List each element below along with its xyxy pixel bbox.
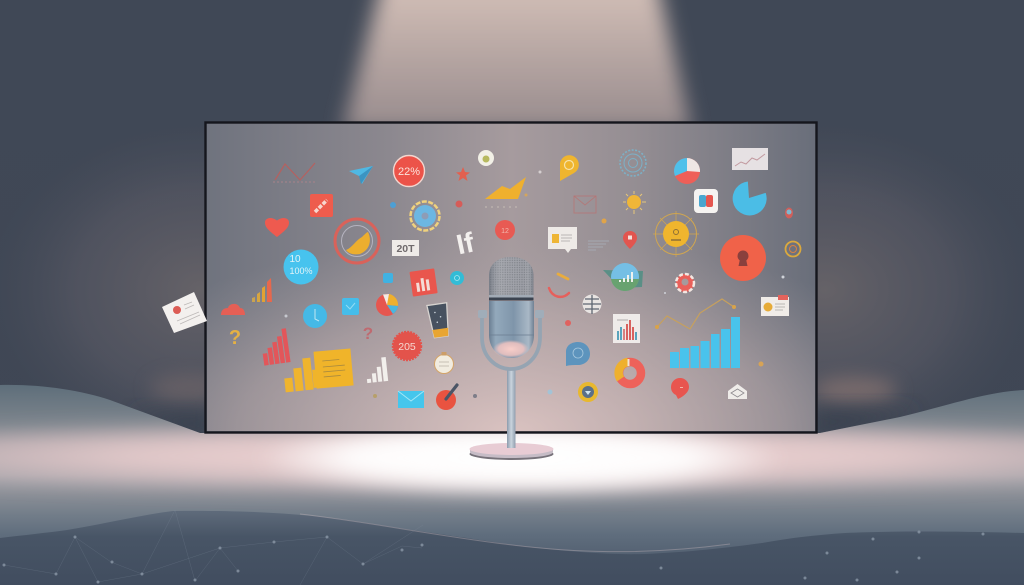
icon: red dial with needle (436, 385, 457, 410)
network lines (4, 510, 423, 585)
icon: star (456, 167, 470, 181)
icon: small blue red pin (785, 208, 793, 218)
icon: gold ring (786, 242, 800, 256)
icon: teal circle (450, 271, 464, 285)
chart: donut (619, 359, 641, 384)
spotlight beam (342, 0, 692, 132)
icon: blue globe with green base (603, 263, 643, 291)
icon: blue square (383, 273, 393, 283)
icon: cloud (221, 304, 245, 315)
icon: red white ring (676, 274, 694, 292)
icon: clock (303, 304, 327, 328)
icon: yellow document (311, 348, 354, 389)
accent dots (284, 170, 784, 398)
bottom wave with network (0, 510, 1024, 585)
icon: grey text lines (588, 241, 609, 250)
icon: red square badge (310, 194, 333, 217)
icon: blue percent circle: 100% (289, 266, 313, 276)
icon: white bar chart (365, 357, 388, 383)
icon: red keyhole circle (720, 235, 766, 281)
icon: blue percent circle (284, 250, 318, 284)
icon: sun (623, 191, 646, 214)
icon: white badge (478, 150, 494, 166)
icon: red percent circle: 22% (398, 166, 420, 178)
icon: 20T label (392, 240, 419, 256)
microphone mesh head (489, 257, 534, 295)
icon: colored pie (376, 294, 398, 316)
icon: 20T label: 20T (396, 243, 415, 255)
icon: flower badge (410, 202, 440, 230)
icon: white chat card (548, 227, 577, 253)
icon: white line chart card (732, 148, 768, 170)
icon: heart (265, 218, 289, 237)
icon: red map pin (623, 231, 637, 249)
icon: yellow circle badge (578, 382, 598, 402)
icon: gold target (653, 211, 699, 257)
icon: pie chart (674, 158, 700, 184)
icon: faded red envelope (574, 196, 596, 213)
screen surface (206, 122, 816, 432)
icon: yellow trend shape (485, 177, 526, 207)
microphone yoke (478, 310, 544, 369)
icon: tilted white card (162, 292, 207, 333)
icon: red percent circle (394, 156, 424, 186)
icon: small red circle (495, 220, 515, 240)
icon: paper plane (349, 166, 373, 184)
floor (0, 384, 1024, 554)
icon: red bar chart square (409, 268, 438, 297)
icon: yellow question mark: ? (229, 327, 241, 349)
icon: blue chat bubble (566, 342, 590, 366)
panel: presentation screen (206, 122, 816, 432)
network nodes (2, 530, 984, 584)
icon: small red circle: 12 (501, 228, 509, 235)
icon: white open envelope (728, 384, 747, 399)
icon: blue percent circle: 10 (289, 254, 301, 265)
icon: blue message square (342, 298, 359, 315)
icon: red badge 205 (393, 332, 421, 360)
icon: blue pie (731, 180, 768, 217)
microphone base (470, 443, 554, 460)
icon: white split badge (694, 189, 718, 213)
icon: white bar chart card (613, 314, 640, 343)
microphone (470, 257, 554, 460)
icon: red question mark: ? (363, 324, 373, 343)
icon: line chart (273, 163, 316, 182)
wall glow around screen (0, 120, 1024, 460)
icon: gold line chart (655, 299, 736, 329)
icon: yellow location pin (560, 155, 579, 181)
chart: blue bars (670, 317, 740, 368)
icon: blue envelope (398, 391, 424, 408)
icon: stopwatch (434, 352, 454, 374)
text: If: If (454, 226, 477, 260)
icon: ring gauge (335, 219, 379, 263)
icon: globe (582, 294, 602, 314)
icon: yellow bar chart (282, 358, 314, 392)
microphone collar (489, 294, 534, 300)
icon: red chat pin (671, 378, 689, 399)
icon: orange small bars (252, 278, 272, 302)
floor light pink (0, 418, 1024, 494)
icon: red arc and yellow dash (549, 274, 569, 297)
icon: red bar chart (260, 328, 291, 366)
icon: blue gear outline (620, 150, 646, 176)
floor light white (278, 434, 762, 503)
wave highlight (300, 514, 730, 552)
icon: phone cup (427, 303, 451, 338)
microphone stem (507, 368, 516, 448)
icon: red badge 205: 205 (398, 341, 416, 353)
microphone body (489, 301, 534, 358)
icon: white card with coin (761, 295, 789, 316)
